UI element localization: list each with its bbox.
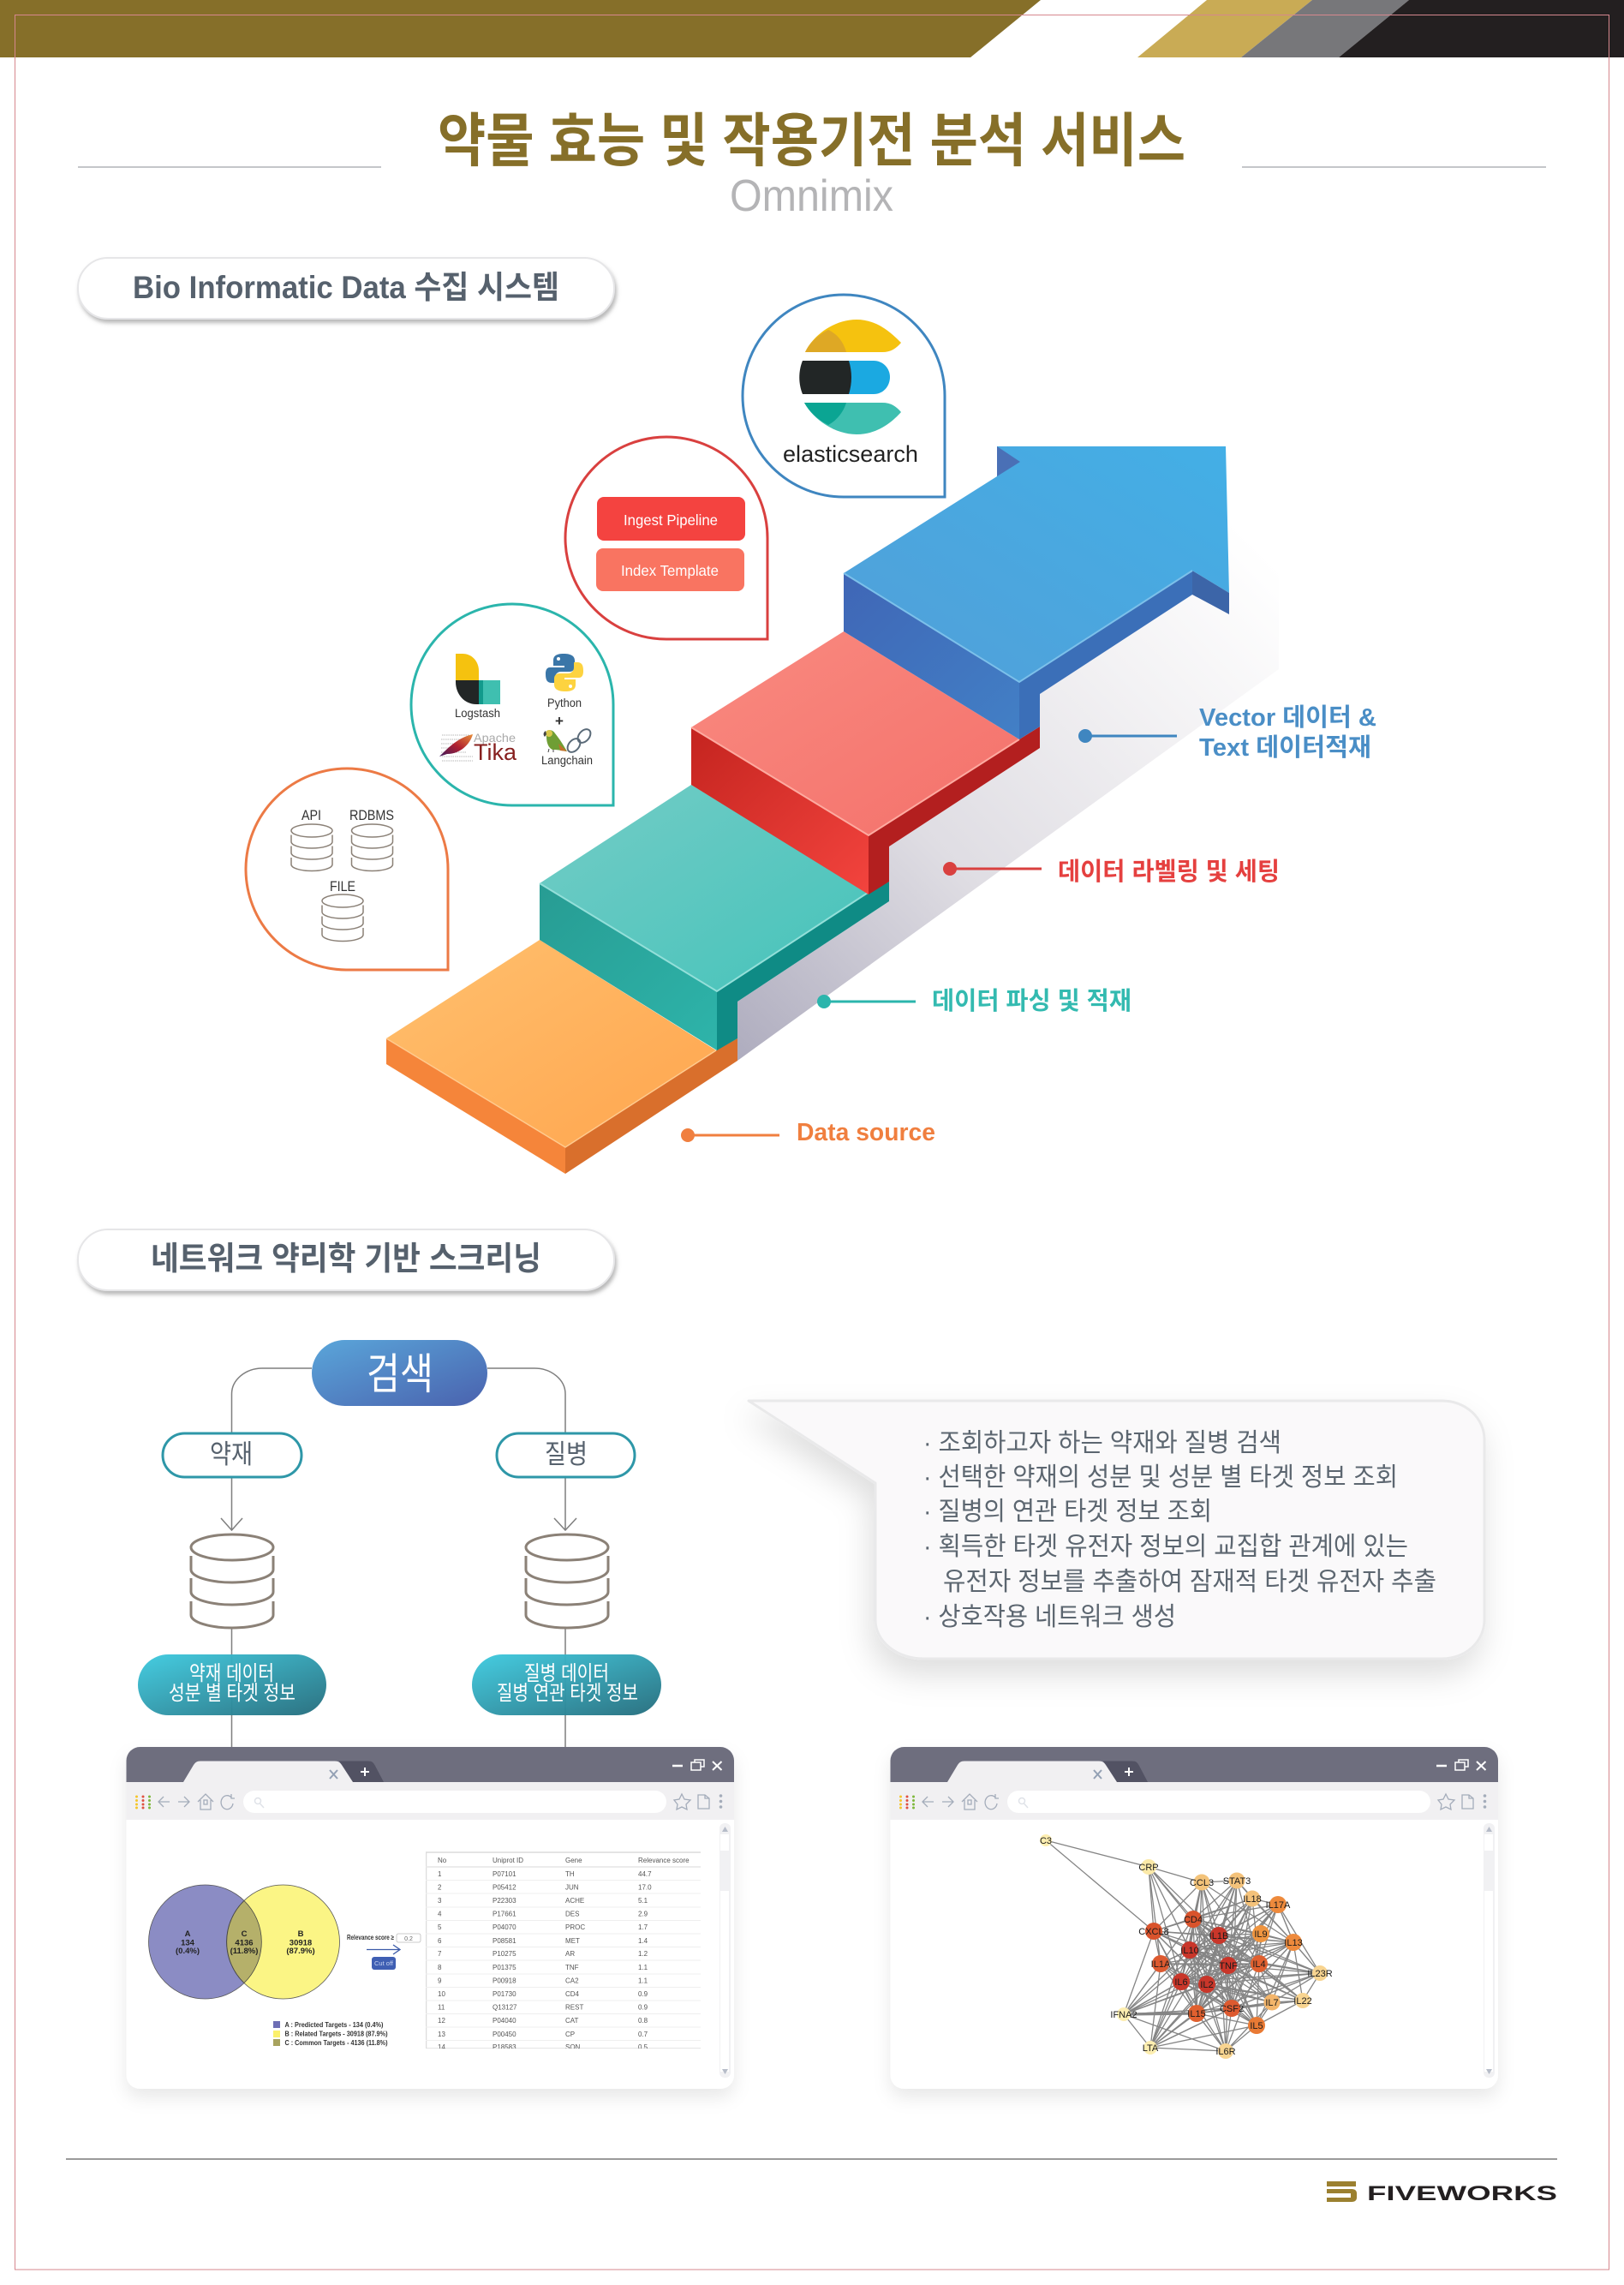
table: relevance scores: Q13127 [493,2003,517,2012]
table: relevance scores: ACHE [565,1897,584,1905]
network graph: C3 [1040,1836,1052,1846]
table: relevance scores: P00918 [493,1977,516,1984]
button: index template [596,548,744,591]
section heading: network pharmacology [78,1229,614,1290]
table: relevance scores: PROC [565,1923,585,1931]
table: relevance scores: P04040 [493,2017,516,2025]
network graph: IL10 [1180,1946,1199,1956]
table: relevance scores: JUN [565,1883,579,1892]
venn diagram: A [185,1929,191,1939]
node: disease data [472,1654,661,1715]
labels: API [302,807,321,823]
label: data parsing [817,987,1131,1015]
subtitle: Omnimix [730,171,893,221]
table: relevance scores: 8 [438,1964,442,1971]
venn legend: A : Predicted Targets - 134 (0.4%) [284,2021,384,2029]
venn legend: C : Common Targets - 4136 (11.8%) [284,2039,388,2047]
network graph: IL23R [1307,1969,1333,1979]
table: relevance scores: MET [565,1937,580,1945]
callout: parsing tools [411,604,613,805]
network graph: STAT3 [1223,1876,1251,1887]
table: relevance scores: 2.9 [638,1911,648,1917]
callout: elasticsearch [743,295,945,497]
table: relevance scores: 44.7 [638,1870,652,1878]
table: relevance scores: 1.7 [638,1923,648,1931]
icon: apache tika: Tika [474,739,517,765]
text: elasticsearch: elasticsearch [783,441,918,467]
label: data labeling: 데이터 라벨링 및 세팅 [1058,858,1280,886]
icon: python [546,654,583,691]
table: relevance scores: P00450 [493,2031,516,2038]
callout: labeling pipeline [565,437,767,639]
table: relevance scores: P05412 [493,1883,516,1892]
table: relevance scores: 17.0 [638,1883,652,1892]
table: relevance scores: 9 [438,1977,442,1984]
table: relevance scores: 0.8 [638,2017,648,2025]
network graph: CCL3 [1190,1878,1214,1888]
network graph: IL7 [1265,1998,1279,2008]
table: relevance scores: 13 [438,2031,445,2038]
text: description list: · 상호작용 네트워크 생성 [923,1603,1176,1631]
text: Logstash: Logstash [455,707,500,720]
table: relevance scores: No [438,1857,447,1864]
network graph: CD4 [1184,1915,1203,1925]
table: relevance scores: TH [565,1870,575,1878]
step: red [691,631,1040,894]
section heading: Bio Informatic Data: Bio Informatic Data 수집 시스템 [133,270,559,305]
network graph: IL15 [1187,2009,1206,2019]
step: orange [386,940,737,1174]
text: description list: · 질병의 연관 타겟 정보 조회 [923,1498,1212,1526]
footer rule [66,2158,1557,2160]
table: relevance scores: 3 [438,1897,442,1905]
section heading: Bio Informatic Data [78,258,614,319]
text: description list: 유전자 정보를 추출하여 잠재적 타겟 유전자 추출 [943,1568,1436,1596]
table: relevance scores: P10275 [493,1950,516,1958]
browser chrome [891,1747,1498,2089]
table: relevance scores: 0.5 [638,2043,648,2051]
cut-off control: Cut off [374,1959,394,1967]
network graph: IL22 [1293,1996,1312,2007]
node: herb data [138,1654,326,1715]
table: relevance scores: 6 [438,1937,442,1945]
browser window: target table [127,1747,734,2089]
step: teal [540,785,889,1050]
network graph: IL5 [1250,2021,1263,2031]
table: relevance scores: P01375 [493,1964,516,1971]
network graph: IL6 [1174,1977,1188,1988]
step: blue arrow [844,446,1229,739]
network graph: CXCL8 [1138,1927,1169,1937]
table: relevance scores: P07101 [493,1870,516,1878]
network graph [1040,1834,1333,2059]
table: relevance scores: 7 [438,1950,442,1958]
icon: databases [291,824,392,941]
network graph: CRP [1138,1863,1159,1873]
table: relevance scores: 5 [438,1923,442,1931]
table: relevance scores: 1.1 [638,1964,648,1971]
table: relevance scores: 2 [438,1883,442,1892]
table: relevance scores: 11 [438,2003,445,2012]
venn diagram: (87.9%) [286,1947,315,1956]
label: data source [681,1119,935,1146]
browser window: interaction network [891,1747,1498,2089]
text: Langchain: Langchain [541,754,593,767]
node: herb data: 약재 데이터 [189,1662,274,1685]
table: relevance scores: 0.9 [638,1990,648,1998]
icon: apache tika [439,731,517,765]
table: relevance scores: SON [565,2043,581,2051]
network graph: IFNA2 [1110,2010,1137,2020]
button: index template: Index Template [621,562,719,579]
labels: FILE [330,878,355,894]
table: relevance scores: TNF [565,1964,579,1971]
node: search [312,1340,487,1406]
section heading: network pharmacology: 네트워크 약리학 기반 스크리닝 [151,1241,541,1277]
node: herb data: 성분 별 타겟 정보 [169,1682,296,1705]
labels: RDBMS [349,807,394,823]
icon: apache tika: Apache [474,731,516,745]
node: search: 검색 [367,1350,433,1398]
label: data source: Data source [797,1119,935,1146]
node: disease data: 질병 연관 타겟 정보 [497,1682,638,1705]
button: ingest pipeline: Ingest Pipeline [624,511,718,529]
network graph: IL2 [1200,1980,1214,1990]
label: vector data [1078,703,1376,762]
network graph: IL1A [1151,1959,1171,1970]
venn diagram: 134 [181,1938,195,1948]
logo: fiveworks [1327,2181,1557,2205]
venn diagram: 4136 [235,1938,254,1948]
text: description list: · 조회하고자 하는 약재와 질병 검색 [923,1429,1281,1457]
network graph: IL1B [1209,1931,1228,1941]
text: description list [923,1429,1436,1631]
node: disease data: 질병 데이터 [524,1662,609,1685]
table: relevance scores: 4 [438,1911,442,1917]
logo: fiveworks: FIVEWORKS [1367,2182,1557,2205]
node: disease: 질병 [545,1439,588,1469]
venn legend: B : Related Targets - 30918 (87.9%) [284,2031,388,2037]
network graph: LTA [1143,2043,1159,2054]
labels [302,807,394,894]
callout: service description [749,1401,1484,1659]
network graph: IL9 [1254,1929,1268,1940]
table: relevance scores: CA2 [565,1977,579,1984]
node: herb: 약재 [210,1439,253,1469]
text: plus: + [555,713,564,729]
title rule left [78,166,381,168]
table: relevance scores: P18583 [493,2043,516,2051]
table: relevance scores: P17661 [493,1911,516,1917]
table: relevance scores: DES [565,1911,579,1917]
table: relevance scores: CP [565,2031,575,2038]
cut-off control: 0.2 [404,1936,413,1942]
icon: elasticsearch logo [799,320,901,434]
venn legend [273,2021,388,2047]
network graph: IL18 [1243,1894,1262,1905]
venn diagram: (11.8%) [230,1947,258,1956]
table: relevance scores: CAT [565,2017,579,2025]
icon: logstash [456,654,500,704]
label: vector data: Vector 데이터 & [1199,703,1376,732]
table: relevance scores: 0.9 [638,2003,648,2012]
network graph: CSF2 [1220,2004,1244,2014]
network graph: TNF [1219,1961,1238,1971]
chart: isometric stairs [386,446,1279,1174]
network graph: IL17A [1266,1900,1291,1911]
text: description list: · 선택한 약재의 성분 및 성분 별 타겟 정보 조회 [923,1463,1398,1492]
table: relevance scores [426,1852,709,2051]
venn diagram [149,1885,339,1999]
node: disease [497,1433,635,1477]
table: relevance scores: 1 [438,1870,442,1878]
table: relevance scores: 10 [438,1990,445,1998]
table: relevance scores: REST [565,2003,583,2012]
icon: herb database [191,1534,273,1628]
cut-off control [347,1934,421,1970]
node: herb [163,1433,302,1477]
network graph: IL4 [1252,1959,1266,1970]
venn diagram: 30918 [290,1938,312,1948]
label: data parsing: 데이터 파싱 및 적재 [932,987,1131,1015]
table: relevance scores: P04070 [493,1923,516,1931]
flow connectors [221,1368,576,1748]
table: relevance scores: P01730 [493,1990,516,1998]
table: relevance scores: Uniprot ID [493,1857,523,1864]
venn diagram: (0.4%) [176,1947,200,1956]
table: relevance scores: 1.2 [638,1950,648,1958]
icon: disease database [526,1534,608,1628]
table: relevance scores: 1.1 [638,1977,648,1984]
table: relevance scores: Gene [565,1857,582,1864]
table: relevance scores: P08581 [493,1937,516,1945]
text: description list: · 획득한 타겟 유전자 정보의 교집합 관계에 있는 [923,1533,1408,1561]
browser chrome [127,1747,734,2089]
label: data labeling [943,858,1280,886]
button: ingest pipeline [597,497,745,541]
table: relevance scores: AR [565,1950,575,1958]
top header band [0,0,1624,57]
table: relevance scores: 12 [438,2017,445,2025]
network graph: IL13 [1284,1938,1303,1948]
cut-off control: Relevance score ≥ [347,1934,394,1941]
network graph: IL6R [1215,2047,1236,2057]
table: relevance scores: 14 [438,2043,445,2051]
label: vector data: Text 데이터적재 [1199,733,1371,762]
callout: data source [246,769,448,970]
icon: langchain parrot and links [544,727,593,755]
title: 약물 효능 및 작용기전 분석 서비스 [438,109,1185,174]
table: relevance scores: 1.4 [638,1937,648,1945]
table: relevance scores: P22303 [493,1897,516,1905]
venn diagram: B [298,1929,304,1939]
text: Python: Python [547,697,582,709]
table: relevance scores: 0.7 [638,2031,648,2038]
stair shadow [737,482,1279,1061]
table: relevance scores: 5.1 [638,1897,648,1905]
venn diagram: C [242,1929,248,1939]
title rule right [1242,166,1546,168]
table: relevance scores: Relevance score [638,1857,690,1864]
table: relevance scores: CD4 [565,1990,580,1998]
